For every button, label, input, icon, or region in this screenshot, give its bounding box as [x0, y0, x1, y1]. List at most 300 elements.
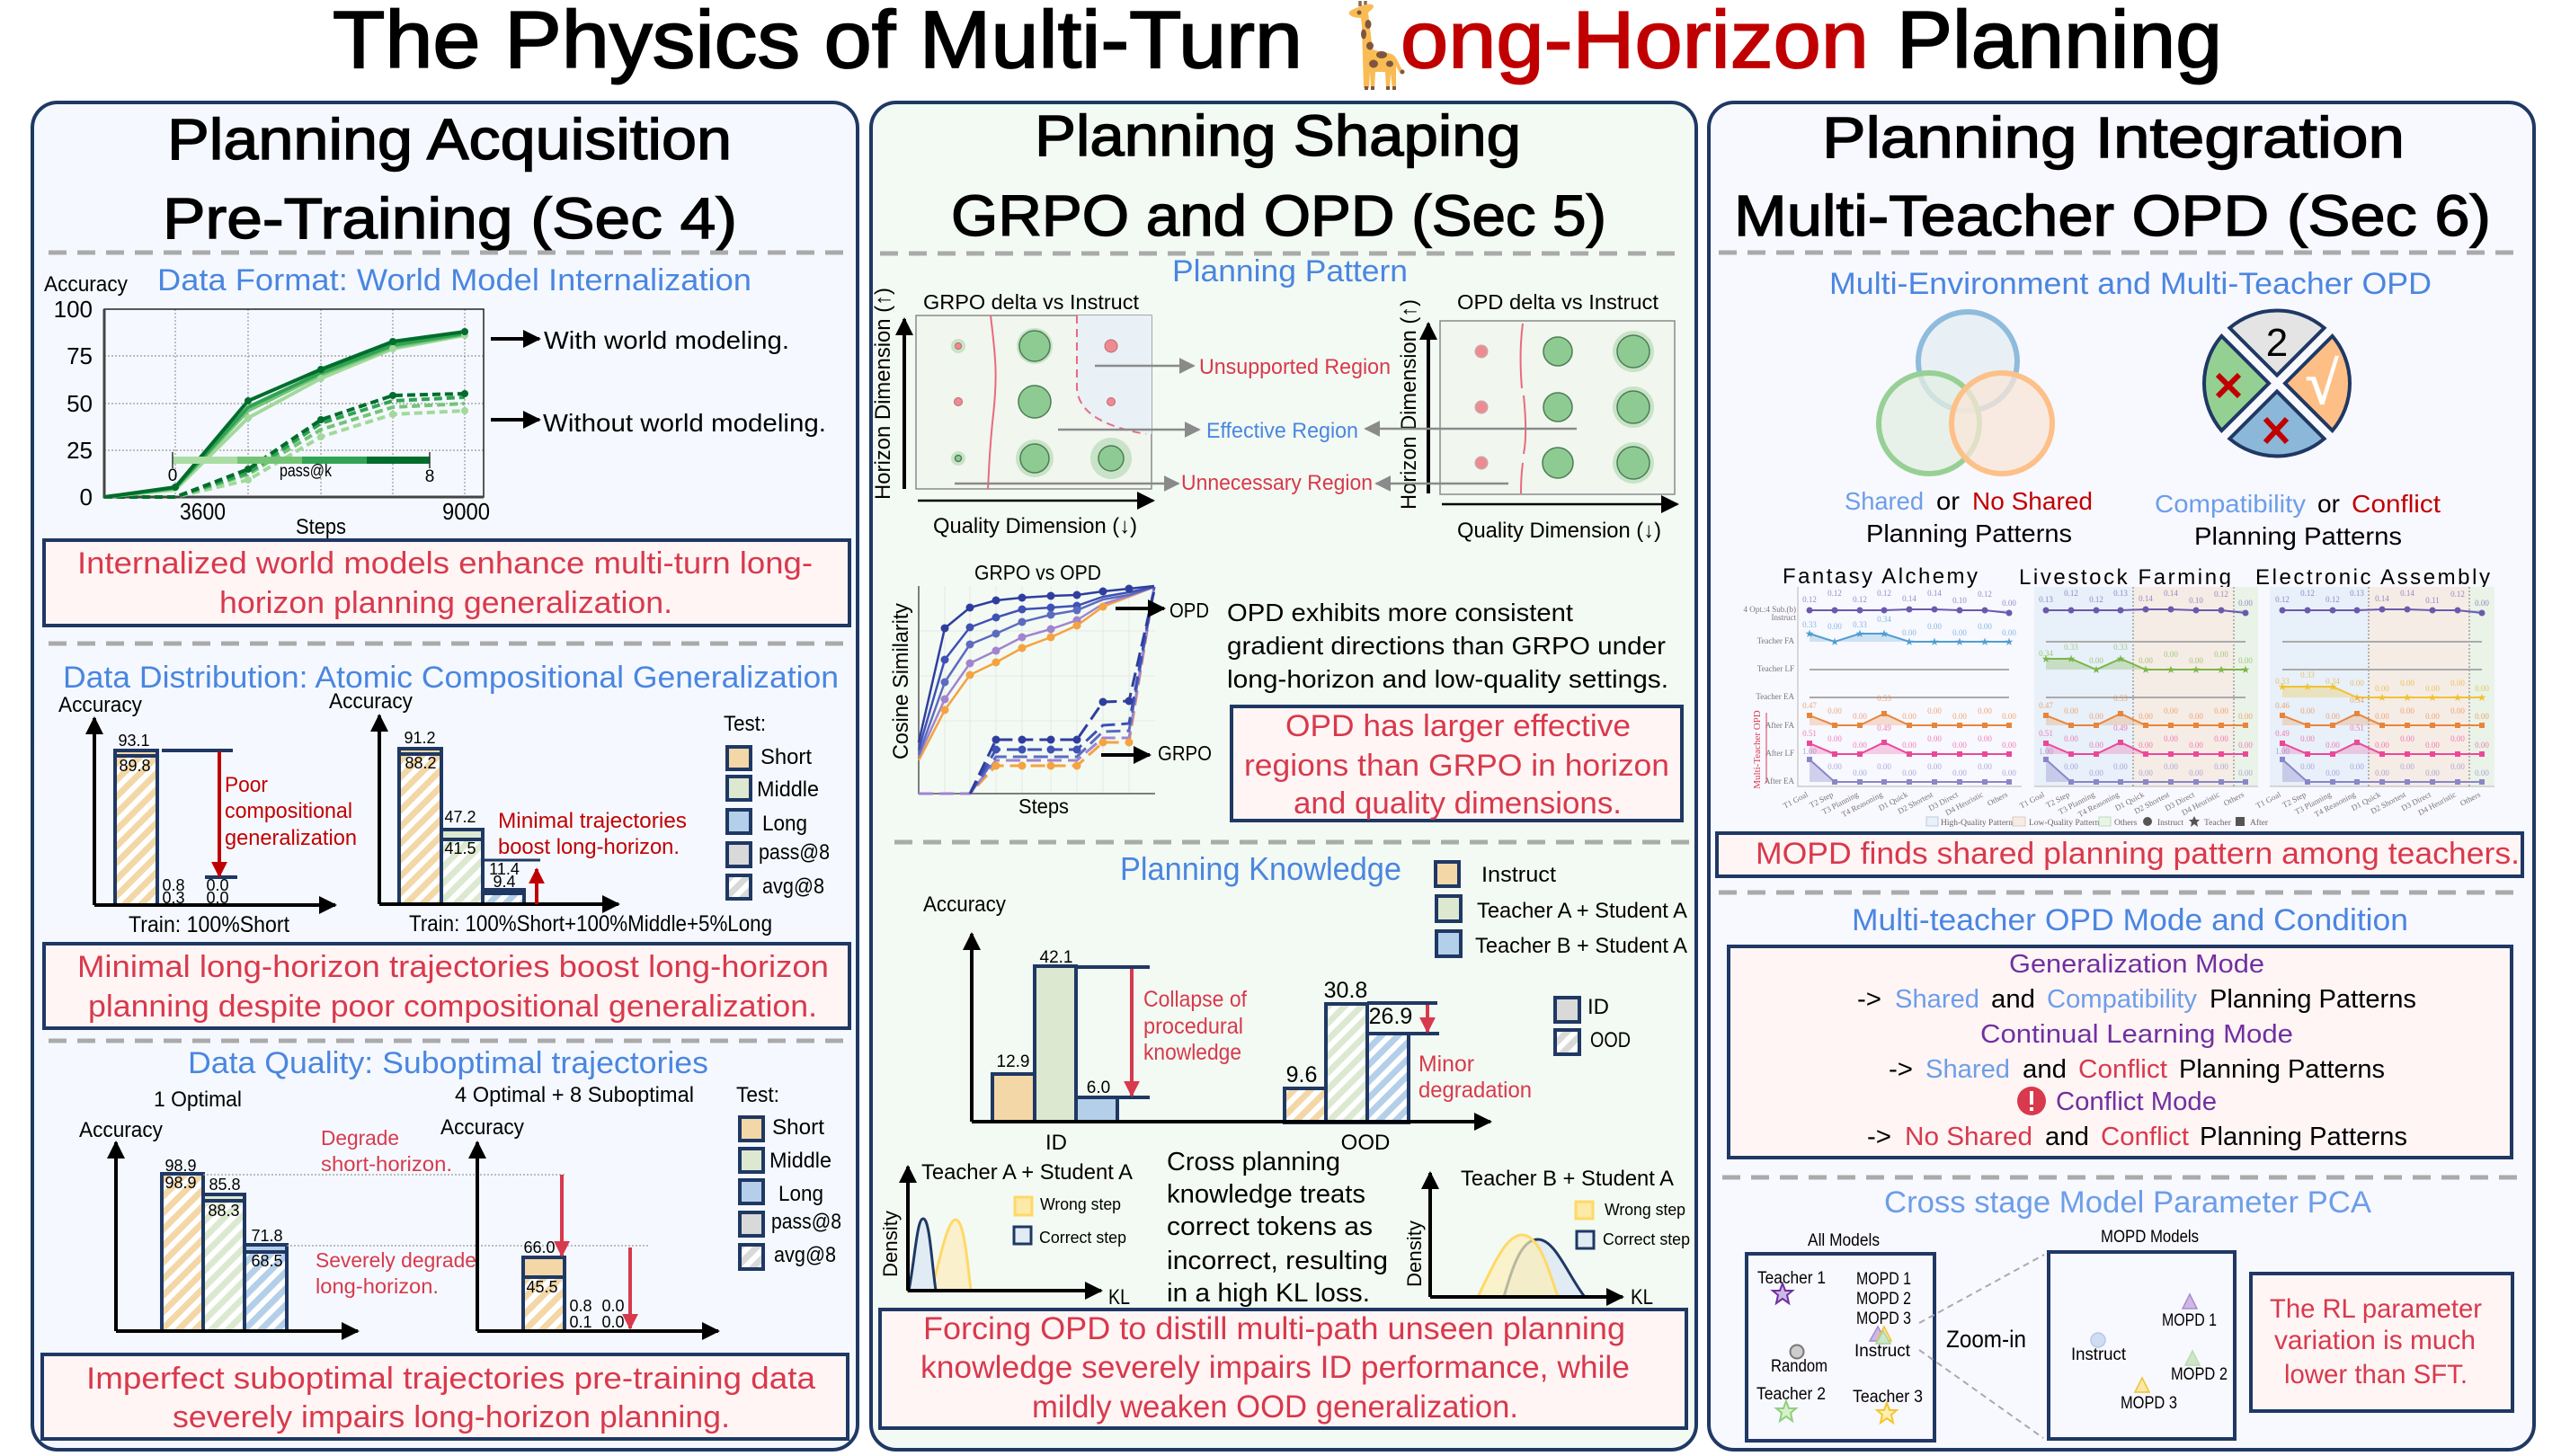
plot values: Fantasy Alchemy: 0.00 [1927, 706, 1942, 715]
callout: suboptimal [42, 1354, 848, 1439]
plot values: Electronic Assembly: 0.00 [2300, 762, 2315, 771]
bar chart: train 100% short: generalization [225, 826, 357, 850]
density chart: Teacher B: Wrong step [1605, 1201, 1685, 1219]
plot values: Electronic Assembly: 0.00 [2475, 712, 2489, 721]
plot values: Livestock Farming: 0.51 [2039, 729, 2053, 738]
plot values: Electronic Assembly: 0.00 [2425, 712, 2440, 721]
caption: shared patterns: Shared [1845, 487, 1924, 515]
box: modes: -> [1867, 1123, 1891, 1151]
plot values: Livestock Farming: 0.12 [2089, 595, 2103, 604]
icon: compatibility wheel [2204, 310, 2350, 457]
bar chart: 4 optimal + 8 suboptimal: 0.1 [569, 1313, 592, 1331]
annotation: without world modeling: Without world modeling. [543, 409, 826, 437]
box: modes: and [2045, 1123, 2089, 1151]
text block: cross planning: knowledge treats [1167, 1180, 1365, 1209]
bar chart: train 100% short: 0.3 [162, 889, 185, 907]
plot values: Livestock Farming: 0.00 [2139, 741, 2153, 750]
plot values: Fantasy Alchemy: 0.12 [1827, 589, 1842, 598]
row labels: 4 Opt.:4 Sub.(b) [1744, 605, 1796, 614]
plot values: Fantasy Alchemy: 0.12 [1853, 595, 1867, 604]
heading: data quality: Data Quality: Suboptimal trajectories [188, 1046, 708, 1080]
label: zoom-in: Zoom-in [1946, 1326, 2026, 1353]
plot values: Livestock Farming: 0.00 [2238, 656, 2253, 665]
x labels: Electronic Assembly: T4 Reasoning [2313, 789, 2357, 819]
icon: compatibility wheel: 2 [2266, 321, 2288, 365]
x labels: Livestock Farming: Others [2222, 789, 2245, 808]
scatter: MOPD models: MOPD 1 [2162, 1311, 2217, 1330]
plot values: Fantasy Alchemy: 0.47 [1802, 701, 1817, 710]
heading: planning knowledge: Planning Knowledge [1120, 850, 1401, 887]
heading: data distribution: Data Distribution: Atomic Compositional Generalization [63, 661, 839, 695]
plot values: Livestock Farming: 0.00 [2214, 650, 2228, 659]
line chart: accuracy vs steps: 75 [67, 342, 93, 369]
plot values: Livestock Farming: 0.49 [2113, 724, 2128, 732]
bar chart: ID vs OOD: knowledge [1143, 1040, 1241, 1065]
bar chart: 4 optimal + 8 suboptimal: 0.0 [601, 1297, 625, 1315]
bar chart: 4 optimal + 8 suboptimal: 0.8 [569, 1297, 592, 1315]
plot values: Electronic Assembly: 0.00 [2400, 734, 2414, 743]
bar chart: train mixed: 88.2 [405, 754, 437, 772]
plot values: Fantasy Alchemy: 0.00 [1978, 706, 1992, 715]
plot values: Livestock Farming: 0.00 [2164, 734, 2178, 743]
plot values: Electronic Assembly: 0.00 [2375, 712, 2389, 721]
callout: suboptimal: severely impairs long-horizon planning. [173, 1400, 730, 1434]
bar chart: 1 optimal: long-horizon. [316, 1274, 439, 1298]
callout: forcing OPD: knowledge severely impairs ID performance, while [920, 1350, 1630, 1385]
callout: RL parameter: The RL parameter [2270, 1294, 2482, 1324]
bar chart: ID vs OOD: OOD [1341, 1131, 1390, 1155]
plot values: Electronic Assembly: 0.00 [2475, 684, 2489, 693]
x labels: Fantasy Alchemy: T3 Planning [1820, 789, 1860, 816]
plot values: Livestock Farming: 0.00 [2238, 768, 2253, 777]
row labels: After EA [1765, 777, 1794, 786]
icon: warning [2017, 1087, 2046, 1115]
panel heading [951, 103, 1606, 248]
plot values: Livestock Farming: 0.00 [2064, 706, 2078, 715]
plot values: Electronic Assembly: 0.00 [2300, 734, 2315, 743]
line chart: accuracy vs steps: 25 [67, 437, 93, 464]
bar chart: train mixed: 91.2 [404, 729, 436, 747]
plot values: Livestock Farming [2039, 589, 2253, 777]
scatter: all models: Random [1771, 1357, 1827, 1376]
density chart: Teacher A: Wrong step [1040, 1195, 1121, 1213]
panel heading [163, 107, 737, 251]
x labels: Fantasy Alchemy: T4 Reasoning [1840, 789, 1884, 819]
x labels: Electronic Assembly: D2 Shortest [2369, 789, 2407, 816]
density chart: Teacher B: KL [1631, 1285, 1653, 1310]
caption: shared patterns: Planning Patterns [1866, 519, 2072, 547]
scatter: all models [1747, 1231, 1934, 1441]
icon: compatibility wheel: √ [2306, 351, 2339, 417]
plot values: Electronic Assembly: 0.12 [2300, 589, 2315, 598]
line chart: accuracy vs steps [44, 272, 490, 539]
scatter: all models: MOPD 3 [1856, 1310, 1911, 1328]
line chart: accuracy vs steps: Accuracy [44, 272, 128, 297]
callout: world models: horizon planning generalization. [219, 586, 672, 620]
bar chart: 1 optimal [79, 1088, 476, 1331]
plot values: Fantasy Alchemy: 0.00 [1853, 768, 1867, 777]
bubble chart: OPD delta vs Instruct: Horizon Dimension (↑) [1397, 299, 1421, 510]
legend: pass@k colour bar: 8 [425, 467, 434, 486]
line chart: accuracy vs steps: Steps [296, 515, 346, 539]
plot values: Livestock Farming: 0.00 [2189, 741, 2203, 750]
bar chart: 4 optimal + 8 suboptimal: 0.0 [601, 1313, 625, 1331]
plot values: Fantasy Alchemy: 0.00 [1853, 741, 1867, 750]
line chart: accuracy vs steps: 50 [67, 390, 93, 417]
legend: test quality: avg@8 [774, 1243, 836, 1267]
panel heading: Multi-Teacher OPD (Sec 6) [1734, 183, 2491, 248]
box: modes [1729, 946, 2512, 1158]
x labels: Fantasy Alchemy: D1 Quick [1877, 789, 1909, 812]
chart titles: Fantasy Alchemy [1783, 564, 1978, 589]
plot values: Fantasy Alchemy: 0.10 [1952, 596, 1967, 605]
legend: ID and OOD [1555, 995, 1631, 1054]
caption: compatibility patterns: or [2317, 490, 2340, 518]
plot values: Electronic Assembly: 0.49 [2275, 729, 2290, 738]
plot values: Fantasy Alchemy: 0.49 [1877, 724, 1891, 732]
bubble chart: OPD delta vs Instruct [1397, 290, 1677, 543]
bar chart: train mixed: 47.2 [444, 808, 476, 826]
plot values: Electronic Assembly: 0.00 [2400, 706, 2414, 715]
heading: planning pattern: Planning Pattern [1172, 254, 1408, 289]
plot values: Livestock Farming: 0.12 [2064, 589, 2078, 598]
plot values: Electronic Assembly: 0.33 [2300, 670, 2315, 679]
legend: pass@k colour bar: pass@k [280, 462, 332, 481]
legend: test distribution: pass@8 [759, 840, 830, 865]
plot backgrounds [1798, 587, 2494, 786]
x labels: Fantasy Alchemy: D4 Heuristic [1943, 790, 1985, 817]
plot values: Electronic Assembly: 0.00 [2375, 741, 2389, 750]
plot values: Livestock Farming: 0.00 [2089, 656, 2103, 665]
scatter: all models: Teacher 2 [1756, 1385, 1826, 1404]
bar chart: ID vs OOD: degradation [1418, 1078, 1532, 1103]
bar chart: train 100% short [58, 693, 357, 937]
plot values: Livestock Farming: 0.00 [2214, 762, 2228, 771]
heading: data format: Data Format: World Model Internalization [157, 263, 751, 297]
line chart: GRPO vs OPD: GRPO vs OPD [974, 561, 1101, 584]
density chart: Teacher B: Teacher B + Student A [1461, 1167, 1674, 1191]
plot values: Livestock Farming: 0.00 [2189, 712, 2203, 721]
plot values: Fantasy Alchemy: 0.00 [1827, 622, 1842, 631]
legend: plots: Teacher [2204, 819, 2232, 828]
bar chart: train 100% short: Accuracy [58, 693, 142, 717]
x labels: Electronic Assembly: T3 Planning [2293, 789, 2333, 816]
plot values: Livestock Farming: 0.00 [2238, 599, 2253, 608]
plot values: Electronic Assembly: 0.00 [2450, 734, 2465, 743]
box: modes: and [1991, 985, 2035, 1014]
plot values: Fantasy Alchemy: 0.12 [1978, 590, 1992, 599]
plot values: Electronic Assembly: 0.34 [2325, 677, 2340, 686]
plot values: Electronic Assembly [2275, 589, 2489, 777]
icon: giraffe [1349, 1, 1404, 90]
plot values: Livestock Farming: 0.00 [2139, 712, 2153, 721]
plot values: Fantasy Alchemy: 0.00 [1827, 734, 1842, 743]
plot values: Electronic Assembly: 0.14 [2400, 589, 2414, 598]
x labels: Electronic Assembly: Others [2459, 789, 2482, 808]
plot values: Livestock Farming: 0.00 [2164, 762, 2178, 771]
panel heading: Pre-Training (Sec 4) [163, 186, 737, 251]
x labels: Fantasy Alchemy: T1 Goal [1782, 789, 1810, 810]
bubble chart: OPD delta vs Instruct: Quality Dimension (↓) [1457, 519, 1661, 543]
plot values: Electronic Assembly: 0.00 [2475, 741, 2489, 750]
bar chart: ID vs OOD [923, 892, 1532, 1155]
plot values: Fantasy Alchemy: 0.00 [2002, 628, 2016, 637]
bar chart: train 100% short: 0.0 [206, 889, 229, 907]
chart titles [1783, 564, 2490, 590]
plot values: Electronic Assembly: 0.00 [2450, 679, 2465, 688]
box: modes: Conflict [2101, 1123, 2189, 1151]
x labels: Livestock Farming: T2 Step [2044, 789, 2071, 810]
plot values: Livestock Farming: 0.00 [2089, 712, 2103, 721]
legend: test distribution: Short [760, 745, 812, 769]
bar chart: 1 optimal: 98.9 [165, 1174, 197, 1192]
plot values: Livestock Farming: 0.00 [2164, 706, 2178, 715]
legend: test quality: Middle [769, 1149, 831, 1173]
bar chart: train 100% short: Poor [225, 773, 268, 797]
plot values: Fantasy Alchemy: 0.00 [1827, 762, 1842, 771]
x labels: Fantasy Alchemy: T2 Step [1808, 789, 1835, 810]
row labels: After LF [1765, 749, 1794, 758]
plot values: Fantasy Alchemy: 0.00 [1927, 734, 1942, 743]
callout: minimal trajectories: Minimal long-horizon trajectories boost long-horizon [77, 950, 829, 984]
scatter: MOPD models: Instruct [2071, 1345, 2127, 1364]
plot values: Electronic Assembly: 0.11 [2425, 596, 2440, 605]
plot values: Livestock Farming: 0.33 [2113, 643, 2128, 652]
callout: suboptimal: Imperfect suboptimal trajectories pre-training data [86, 1362, 815, 1396]
legend: plots [1926, 816, 2269, 828]
legend: plots: Instruct [2157, 819, 2183, 828]
row labels: Teacher FA [1757, 636, 1794, 645]
plot: Electronic Assembly [2282, 609, 2482, 782]
density chart: Teacher B: Density [1403, 1221, 1426, 1287]
plot values: Electronic Assembly: 0.33 [2275, 677, 2290, 686]
plot values: Livestock Farming: 1.00 [2039, 747, 2053, 756]
bar chart: ID vs OOD: 9.6 [1286, 1062, 1317, 1088]
line chart: accuracy vs steps: 9000 [442, 498, 490, 525]
panel: Planning Shaping [871, 102, 1696, 1450]
legend: test quality: Test: [736, 1083, 779, 1107]
plot values: Fantasy Alchemy: 0.12 [1877, 589, 1891, 598]
x labels: Livestock Farming: T1 Goal [2018, 789, 2046, 810]
x labels: Livestock Farming: D3 Direct [2164, 789, 2196, 812]
plot values: Livestock Farming: 0.00 [2214, 706, 2228, 715]
plot values: Fantasy Alchemy: 0.00 [1902, 741, 1916, 750]
chart titles: Electronic Assembly [2255, 565, 2490, 590]
plot values: Livestock Farming: 0.00 [2089, 741, 2103, 750]
bar chart: 4 optimal + 8 suboptimal: Accuracy [440, 1115, 524, 1140]
bar chart: train 100% short: 89.8 [119, 757, 151, 775]
bar chart: train 100% short: 0.0 [206, 876, 229, 894]
arrow labels: regions: Unsupported Region [1199, 355, 1391, 379]
plot values: Fantasy Alchemy [1802, 589, 2016, 777]
dot-line charts: three environments [1744, 564, 2494, 828]
bar chart: train mixed: boost long-horizon. [498, 835, 680, 859]
legend: pass@k colour bar [168, 452, 434, 486]
plot: Livestock Farming [2046, 609, 2245, 782]
plot values: Fantasy Alchemy: 1.00 [1802, 747, 1817, 756]
plot values: Electronic Assembly: 0.12 [2450, 590, 2465, 599]
bar chart: 1 optimal: 88.3 [208, 1202, 240, 1220]
bar chart: ID vs OOD: 26.9 [1369, 1004, 1412, 1029]
heading: multi-environment: Multi-Environment and Multi-Teacher OPD [1829, 267, 2432, 301]
bar chart: train mixed: 41.5 [444, 839, 476, 857]
text block: cross planning: Cross planning [1167, 1148, 1340, 1176]
callout: RL parameter: variation is much [2274, 1326, 2476, 1355]
scatter: MOPD models: MOPD Models [2101, 1228, 2199, 1247]
plot values: Electronic Assembly: 0.12 [2275, 595, 2290, 604]
x labels: Fantasy Alchemy: D2 Shortest [1896, 789, 1934, 816]
legend: plots: Others [2114, 819, 2138, 828]
box: modes: No Shared [1905, 1123, 2032, 1151]
plot values: Fantasy Alchemy: 0.34 [1877, 615, 1891, 624]
scatter: all models: MOPD 1 [1856, 1270, 1911, 1289]
callout: forcing OPD [880, 1310, 1686, 1428]
legend: plots: High-Quality Pattern [1941, 819, 2013, 828]
bar chart: 1 optimal: Accuracy [79, 1118, 163, 1142]
x labels: Livestock Farming: D4 Heuristic [2180, 790, 2221, 817]
line chart: GRPO vs OPD: Steps [1018, 795, 1069, 818]
plot values: Livestock Farming: 0.33 [2064, 643, 2078, 652]
callout: MOPD: MOPD finds shared planning pattern among teachers. [1756, 837, 2520, 871]
bar chart: train mixed: 9.4 [493, 873, 516, 891]
plot values: Fantasy Alchemy: 0.14 [1927, 589, 1942, 598]
line chart: accuracy vs steps: 0 [80, 484, 93, 510]
callout: effective regions: and quality dimensions. [1294, 786, 1622, 821]
line chart: accuracy vs steps: 3600 [180, 498, 226, 525]
scatter: all models: Teacher 1 [1757, 1269, 1826, 1288]
plot values: Fantasy Alchemy: 0.00 [1902, 628, 1916, 637]
plot values: Electronic Assembly: 0.00 [2400, 679, 2414, 688]
plot: Fantasy Alchemy [1810, 609, 2009, 782]
plot values: Fantasy Alchemy: 0.00 [1927, 622, 1942, 631]
bar chart: 4 optimal + 8 suboptimal: 66.0 [523, 1238, 556, 1256]
bubble chart: GRPO delta vs Instruct: Horizon Dimension (↑) [871, 288, 895, 500]
scatter: all models: Teacher 3 [1853, 1388, 1923, 1407]
heading: PCA: Cross stage Model Parameter PCA [1884, 1185, 2371, 1220]
plot values: Fantasy Alchemy: 0.00 [1952, 768, 1967, 777]
caption: compatibility patterns: Conflict [2352, 490, 2441, 518]
heading: mode and condition: Multi-teacher OPD Mode and Condition [1852, 903, 2408, 937]
x labels: Fantasy Alchemy: D3 Direct [1927, 789, 1960, 812]
bar chart: train mixed: Accuracy [329, 689, 413, 714]
box: modes: Planning Patterns [2210, 985, 2416, 1014]
callout: RL parameter [2251, 1274, 2512, 1411]
bubble chart: GRPO delta vs Instruct [871, 288, 1153, 538]
chart titles: Livestock Farming [2019, 565, 2231, 590]
plot values: Electronic Assembly: 0.00 [2325, 768, 2340, 777]
box: modes: Shared [1895, 985, 1979, 1014]
plot values: Electronic Assembly: 0.00 [2375, 684, 2389, 693]
density chart: Teacher A: KL [1108, 1285, 1130, 1310]
plot values: Electronic Assembly: 0.13 [2350, 589, 2364, 598]
legend: test quality: pass@8 [771, 1210, 841, 1234]
bar chart: train mixed: Minimal trajectories [498, 809, 687, 833]
plot values: Fantasy Alchemy: 0.00 [1952, 628, 1967, 637]
row labels: Instruct [1771, 613, 1796, 622]
bar chart: 1 optimal: 1 Optimal [154, 1088, 242, 1112]
plot values: Livestock Farming: 0.14 [2139, 594, 2153, 603]
x labels: Livestock Farming: D2 Shortest [2132, 789, 2171, 816]
bar chart: ID vs OOD: 12.9 [997, 1052, 1029, 1071]
bar chart: 4 optimal + 8 suboptimal [440, 1083, 718, 1331]
bar chart: train mixed [329, 689, 772, 937]
text block: cross planning [1167, 1148, 1388, 1308]
line chart: GRPO vs OPD [889, 561, 1212, 818]
panel heading: Planning Acquisition [167, 107, 732, 172]
plot values: Electronic Assembly: 0.00 [2425, 768, 2440, 777]
bar chart: ID vs OOD: Collapse of [1143, 987, 1247, 1012]
plot values: Livestock Farming: 0.00 [2139, 656, 2153, 665]
plot values: Livestock Farming: 0.13 [2039, 595, 2053, 604]
bar chart: 4 optimal + 8 suboptimal: 4 Optimal + 8 Suboptimal [455, 1083, 694, 1107]
venn diagram [1879, 312, 2052, 474]
plot values: Electronic Assembly: 0.54 [2350, 696, 2364, 705]
box: modes: Planning Patterns [2200, 1123, 2407, 1151]
plot values: Livestock Farming: 0.14 [2164, 589, 2178, 598]
plot values: Electronic Assembly: 0.00 [2450, 762, 2465, 771]
plot values: Livestock Farming: 0.00 [2238, 741, 2253, 750]
box: modes: -> [1857, 985, 1881, 1014]
legend: test distribution: Middle [757, 777, 819, 802]
panel heading: Planning Shaping [1035, 103, 1521, 168]
panel heading: Planning Integration [1822, 105, 2405, 170]
bar chart: train 100% short: 93.1 [118, 732, 150, 750]
x labels: Livestock Farming: T3 Planning [2057, 789, 2096, 816]
plot values: Fantasy Alchemy: 0.00 [2002, 741, 2016, 750]
box: modes: Conflict Mode [2056, 1088, 2217, 1116]
panel: Planning Integration [1709, 102, 2534, 1450]
x labels: Livestock Farming: T4 Reasoning [2076, 789, 2121, 819]
x labels: Livestock Farming: D1 Quick [2113, 789, 2146, 812]
legend: ID and OOD: ID [1587, 995, 1609, 1019]
plot values: Electronic Assembly: 0.00 [2325, 712, 2340, 721]
plot values: Livestock Farming: 0.53 [2113, 694, 2128, 703]
plot values: Electronic Assembly: 0.12 [2325, 595, 2340, 604]
bar chart: 4 optimal + 8 suboptimal: 45.5 [526, 1278, 558, 1296]
plot values: Electronic Assembly: 0.00 [2425, 741, 2440, 750]
legend: teachers: Teacher B + Student A [1475, 934, 1687, 958]
density chart: Teacher A: Correct step [1039, 1229, 1126, 1247]
bar chart: 1 optimal: Severely degrade [316, 1248, 476, 1272]
plot values: Electronic Assembly: 0.51 [2350, 724, 2364, 732]
plot values: Electronic Assembly: 0.00 [2450, 706, 2465, 715]
plot values: Fantasy Alchemy: 0.00 [1827, 706, 1842, 715]
bar chart: 1 optimal: 85.8 [209, 1176, 241, 1194]
plot values: Livestock Farming: 0.00 [2189, 768, 2203, 777]
box: modes: Compatibility [2047, 985, 2198, 1014]
label: multi-teacher OPD: Multi-Teacher OPD [1752, 710, 1763, 789]
legend: test distribution [724, 712, 830, 899]
callout: world models [44, 540, 849, 626]
text block: cross planning: correct tokens as [1167, 1212, 1373, 1241]
box: modes: Conflict [2078, 1055, 2167, 1084]
bar chart: 1 optimal: Degrade [321, 1126, 399, 1150]
bubble chart: GRPO delta vs Instruct: Quality Dimension (↓) [933, 514, 1137, 538]
box: modes: Generalization Mode [2009, 950, 2264, 979]
plot values: Livestock Farming: 0.00 [2214, 734, 2228, 743]
callout: RL parameter: lower than SFT. [2284, 1360, 2468, 1389]
plot values: Fantasy Alchemy: 0.14 [1902, 594, 1916, 603]
plot values: Livestock Farming: 0.00 [2089, 768, 2103, 777]
bar chart: train 100% short: Train: 100%Short [129, 912, 289, 937]
bar chart: train 100% short: compositional [225, 799, 352, 823]
caption: compatibility patterns: Compatibility [2155, 490, 2306, 518]
x labels: Electronic Assembly: D4 Heuristic [2416, 790, 2458, 817]
row labels [1744, 605, 1796, 786]
plot values: Electronic Assembly: 0.46 [2275, 701, 2290, 710]
plot values: Livestock Farming: 0.13 [2113, 589, 2128, 598]
box: modes: Continual Learning Mode [1980, 1020, 2293, 1049]
